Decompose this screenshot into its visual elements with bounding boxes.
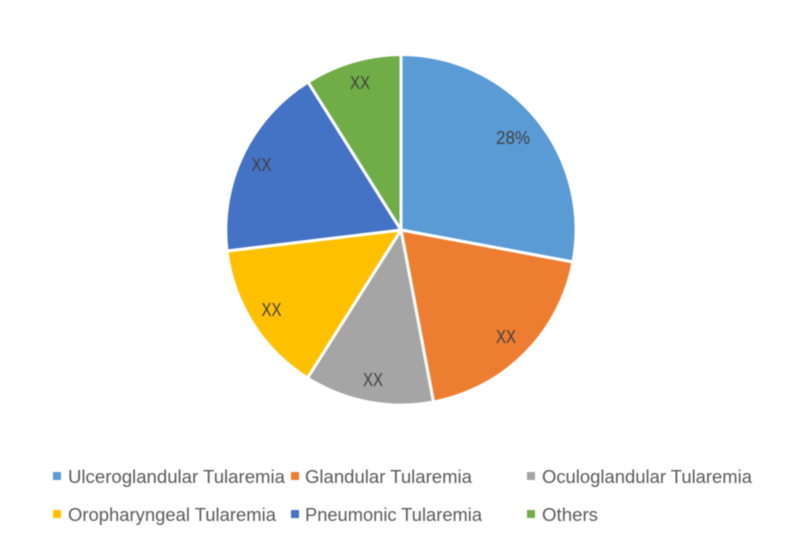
label: Others value: XX [350,73,370,93]
legend: Others: Others [542,505,598,525]
slice: Ulceroglandular Tularemia 28% [401,54,576,262]
label: Pneumonic value: XX [252,155,272,175]
legend: Pneumonic Tularemia: Pneumonic Tularemia [305,505,483,525]
slice: Others [308,54,401,230]
label: 28%: 28% [496,128,530,148]
label: Oropharyngeal value: XX [262,300,282,320]
slice: Glandular Tularemia [401,230,573,402]
slice: Oropharyngeal Tularemia [227,230,401,378]
data labels [252,73,530,390]
pie chart [226,54,576,405]
label: Glandular value: XX [496,327,516,347]
slice: Pneumonic Tularemia [226,82,401,251]
legend: Glandular Tularemia: Glandular Tularemia [305,467,473,487]
label: Oculoglandular value: XX [363,370,383,390]
slice: Oculoglandular Tularemia [308,230,434,405]
legend [53,467,753,525]
legend: Oropharyngeal Tularemia: Oropharyngeal Tularemia [68,505,277,525]
legend: Oculoglandular Tularemia: Oculoglandular Tularemia [542,467,753,487]
legend: Ulceroglandular Tularemia: Ulceroglandular Tularemia [68,467,286,487]
